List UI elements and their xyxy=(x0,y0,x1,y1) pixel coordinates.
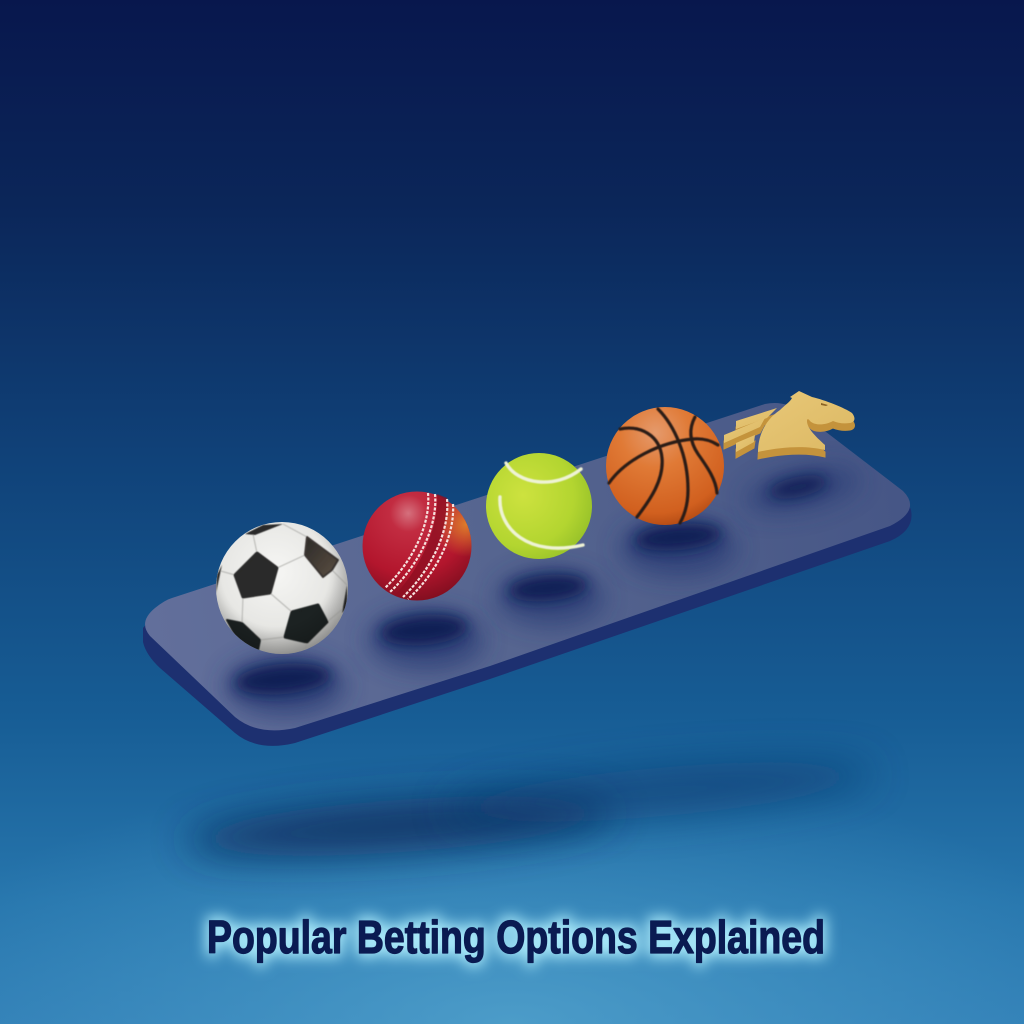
floor shadow xyxy=(184,749,876,867)
horse front face xyxy=(724,391,854,452)
icon: soccer ball xyxy=(216,522,348,654)
horse extrusion xyxy=(724,398,854,459)
icon: basketball xyxy=(606,407,724,525)
title: Popular Betting Options Explained xyxy=(207,911,825,963)
icon: cricket ball xyxy=(362,492,472,600)
icon: tennis ball xyxy=(486,453,592,559)
icon: gold horse head xyxy=(724,391,854,459)
platform xyxy=(143,403,912,746)
platform side edge xyxy=(143,495,912,746)
plate contact shadows xyxy=(225,458,863,716)
horse eye xyxy=(821,403,828,406)
title: Popular Betting Options Explained xyxy=(207,911,825,963)
platform top surface xyxy=(145,403,910,730)
